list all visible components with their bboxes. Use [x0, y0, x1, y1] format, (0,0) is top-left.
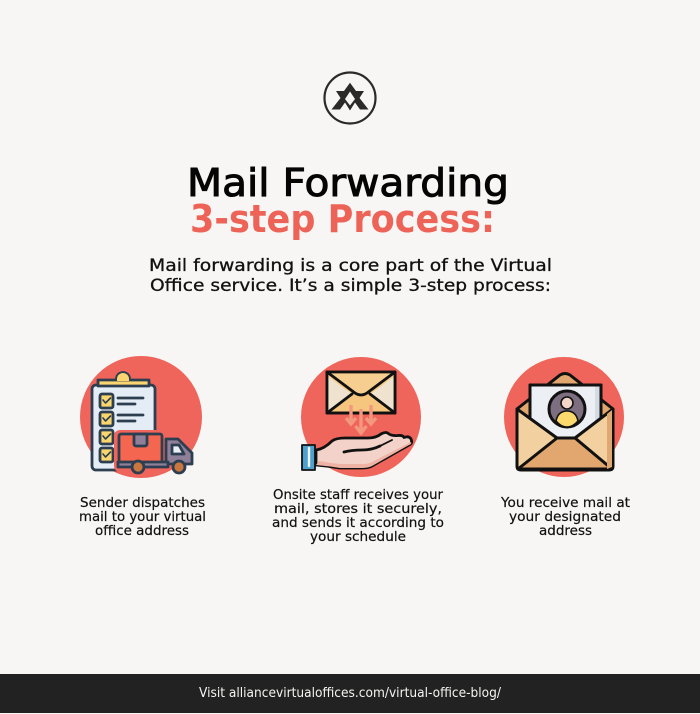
step 1 caption: mail to your virtual [79, 510, 206, 525]
step 2 caption: and sends it according to [272, 516, 444, 531]
intro text: Office service. It’s a simple 3-step process: [150, 276, 551, 296]
step 3 caption [500, 496, 630, 539]
intro text: Mail forwarding is a core part of the Virtual [149, 256, 552, 276]
icon: company logo [324, 72, 376, 124]
icon: hand receiving envelope [301, 357, 421, 477]
step 3 caption: address [539, 524, 592, 539]
title: Mail Forwarding [187, 161, 509, 205]
step 1 caption: office address [95, 524, 189, 539]
icon: clipboard and delivery truck [80, 356, 202, 478]
step 2 caption: mail, stores it securely, [274, 502, 442, 517]
step 2 caption: Onsite staff receives your [273, 488, 444, 503]
icon: open envelope with profile letter [504, 357, 624, 477]
step 3 caption: your designated [509, 510, 621, 525]
step 2 caption: your schedule [310, 530, 406, 545]
step 1 caption [79, 496, 206, 539]
step 2 caption [272, 488, 444, 545]
footer bar [0, 674, 700, 713]
footer bar: Visit alliancevirtualoffices.com/virtual-office-blog/ [199, 686, 502, 701]
title: 3-step Process: [190, 197, 495, 241]
panel: step 3 [500, 357, 630, 539]
title [187, 161, 509, 241]
panel: step 1 [79, 356, 206, 539]
step 1 caption: Sender dispatches [80, 496, 205, 511]
panel: step 2 [272, 357, 444, 545]
intro text [149, 256, 552, 296]
step 3 caption: You receive mail at [500, 496, 630, 511]
